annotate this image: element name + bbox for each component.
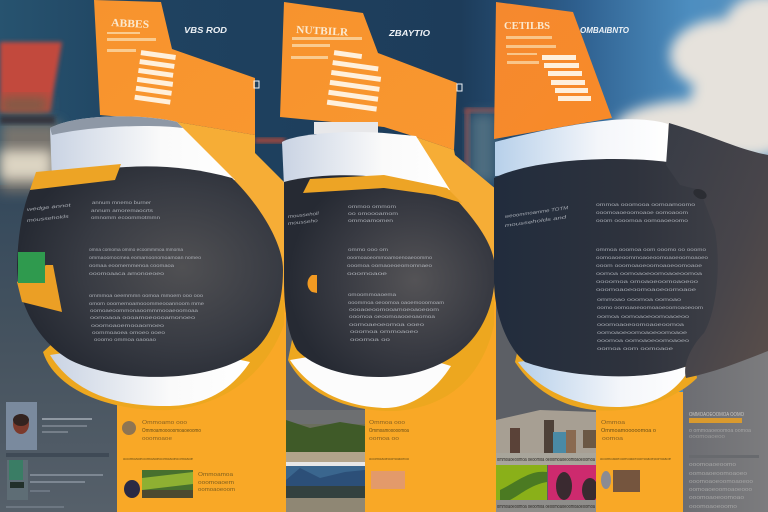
drum 1 text: oommoaoea omoeo ooeo bbox=[92, 330, 166, 335]
drum 2 text: ooomoa oo bbox=[350, 337, 391, 342]
flag 1 with yellow fold: VBS ROD bbox=[184, 26, 227, 35]
drum 2 orange crescent icon bbox=[308, 275, 317, 293]
flag 3: OMBAIBNTO bbox=[580, 26, 630, 35]
drum 2 top white band bbox=[282, 132, 450, 190]
flag 2 with yellow fold: ZBAYTIO bbox=[388, 29, 431, 38]
right grey panel content: ooomoaoeoomo bbox=[689, 504, 737, 510]
drum 1 gold rim bbox=[43, 300, 284, 410]
flag 2 with yellow fold: NUTBILR bbox=[296, 24, 349, 39]
panel 1 heading: Ommoamo ooo bbox=[142, 420, 187, 426]
drum 2 bottom white band bbox=[290, 345, 451, 408]
drum 3 text: ommoao ooomoa oomoao bbox=[597, 297, 682, 302]
panel 1 round badge bbox=[122, 421, 136, 435]
panel 3 brown card bbox=[613, 470, 640, 492]
drum 2 text: ooomoaoe bbox=[347, 271, 388, 276]
drum 2 bbox=[282, 122, 495, 411]
drum 2 text: ooomoa oomaoeoeomomnaeo bbox=[347, 263, 433, 268]
orange panel 2 content: oomoa oo bbox=[369, 436, 399, 442]
panel 1 dark icon bbox=[124, 480, 140, 498]
panel 1 heading bbox=[123, 420, 201, 461]
right grey panel content: OMMOAOEOOMOA OOMO bbox=[689, 412, 744, 418]
clouds bbox=[615, 0, 768, 157]
right grey panel content bbox=[689, 412, 759, 510]
flag 1 with yellow fold: ABBES bbox=[111, 17, 149, 31]
flag 2 with yellow fold bbox=[280, 2, 497, 300]
orange panel 2 content: Ommoa ooo bbox=[369, 420, 405, 426]
drum 3 text: ooomoaoeoomoaoeoomoa bbox=[597, 322, 685, 327]
drum 3 text: ooom oooomoa oomoaoeoomo bbox=[596, 218, 689, 223]
gallery photo bbox=[496, 410, 596, 453]
drum 3 gold rim bbox=[515, 340, 697, 411]
drum 2 text: mousseho bbox=[288, 218, 319, 226]
drum 2 text: ommoamomen bbox=[348, 218, 394, 223]
drum 2 text: oooaoeoomooamoeoaoeoom bbox=[349, 307, 439, 312]
drum 1 gold stripe bbox=[30, 164, 121, 190]
drum 2 text: ooommoa oeoomoa oaoemooomoam bbox=[348, 300, 444, 305]
green photo bbox=[496, 465, 547, 500]
drum 2 text bbox=[288, 204, 444, 342]
drum 3 top white band bbox=[495, 119, 668, 176]
drum 3 bottom white band bbox=[518, 350, 690, 407]
panel 1 photo caption: Ommoamoa bbox=[198, 472, 233, 478]
orange panel 3 content: oomoa bbox=[602, 436, 623, 442]
drum 1 text: omom ooomemoamooommeooannoom mme bbox=[89, 301, 205, 306]
drum 1 text: ommmoa oeemmmn oomoa mmoem ooo ooo bbox=[89, 293, 204, 298]
drum 3 text: oomoa oom oomoaoe bbox=[597, 346, 674, 351]
drum 1 text: oomoaeoommonaoommmooaeoomoaa bbox=[90, 308, 199, 313]
pink button bbox=[371, 471, 405, 489]
drum 3 text: oooomoa omoaoeoomoaoeoo bbox=[596, 279, 699, 284]
right grey panel content: ooomoaoeoomoao bbox=[689, 495, 744, 501]
drum 1 text: oomoaoa oooamoeoooamonoeo bbox=[90, 315, 196, 320]
drum 2 text: oo omoooamom bbox=[348, 211, 398, 216]
panel 1 heading: ooomoaoe bbox=[142, 436, 172, 442]
drum 1 text: wedge annot bbox=[27, 202, 72, 212]
drum 2 text: ommoo ommom bbox=[348, 204, 396, 209]
panel 1 photo caption bbox=[198, 472, 235, 493]
orange panel 3 content: Ommoa bbox=[601, 420, 625, 426]
drum 3 text: oomoaoeoomoaoeoomoaoe bbox=[597, 330, 688, 335]
drum 1 text: ooomo ommoa oaooao bbox=[94, 337, 157, 342]
portrait card bbox=[6, 402, 37, 450]
panel 1 photo caption: ooomoaoem bbox=[198, 480, 234, 486]
panel 1 photo caption: oomoaoeoom bbox=[198, 487, 235, 493]
orange panel 3 content bbox=[600, 420, 672, 492]
drum 1 text: ooomoaoemooaomoeo bbox=[91, 323, 165, 328]
flag 3: CETILBS bbox=[504, 20, 550, 32]
orange panel backing bbox=[117, 180, 683, 512]
drum 1 text bbox=[27, 200, 205, 342]
drum 2 gold rim bbox=[288, 300, 494, 411]
drum 1 green and orange tag bbox=[17, 252, 62, 312]
drum 1 top white band bbox=[50, 116, 235, 180]
drum 1 text: ommaoomocmea eomamoonomoamoan nomeo bbox=[89, 255, 201, 260]
gallery column 3 bbox=[496, 250, 598, 512]
drum 3 bbox=[494, 119, 768, 411]
panel 1 heading: ooomoaoeoomoaoeoomoaoeoomoaoe bbox=[123, 456, 194, 461]
flag 1 with yellow fold bbox=[94, 0, 284, 290]
gallery caption: ommoaoeoomoa oeoomoa oeoomoaoeoomoaoeoomoa bbox=[497, 457, 595, 463]
drum 2 text: oomoaeoeomoa ooeo bbox=[349, 322, 425, 327]
drum 1 bottom white band bbox=[50, 340, 250, 406]
drum 3 text: ooom ooomoaoeoomoaoeoomoaoe bbox=[596, 263, 703, 268]
drum 2 text: ooomoaoeommoamoenoaeoommo bbox=[347, 255, 433, 260]
right grey panel content: ooomoaoeoomoaoeoo bbox=[689, 479, 753, 485]
right grey panel content: oomoaoeoomoaoeo bbox=[689, 471, 747, 477]
panel 3 badge bbox=[601, 471, 611, 489]
bottom right grey panel bbox=[683, 340, 768, 512]
drum 3 text: weoommoamme TOTM bbox=[504, 205, 569, 219]
bottom left profile cards bbox=[6, 402, 109, 508]
orange panel 2 content bbox=[369, 420, 410, 489]
drum 1 text: annum mnemo burner bbox=[92, 200, 152, 205]
landscape photo bbox=[286, 410, 365, 462]
drum 1 text: mousseholds bbox=[27, 214, 70, 223]
drum 2 text: omoommoaoema bbox=[348, 292, 397, 297]
green thumbnail caption bbox=[6, 474, 103, 508]
drum 1 text: omnomm ecoommotmmn bbox=[91, 215, 161, 220]
panel 1 field photo bbox=[142, 470, 193, 498]
portrait caption bbox=[42, 418, 92, 433]
drum 3 text bbox=[504, 202, 709, 351]
drum 2 gold stripe bbox=[303, 175, 462, 203]
orange panel 3 content: Ommoamooooomoa o bbox=[601, 428, 656, 434]
drum 3 dark body bbox=[494, 159, 730, 376]
drum 3 text: oomoa oomoaoeoomoaoeoo bbox=[597, 314, 690, 319]
drum 2 text: ommo ooo om bbox=[348, 247, 388, 252]
drum 3 text: oomoaoeoommoaoeoomoaoeoomoaoeo bbox=[596, 255, 709, 260]
orange panel 2 content: Ommoamooooomoa bbox=[369, 428, 409, 434]
photo column 2 backing and photos bbox=[286, 300, 365, 512]
mountain lake photo bbox=[286, 466, 365, 498]
pink photo bbox=[548, 465, 598, 502]
drum 3 text: oomoa oomoaoeoomoaoeoomoa bbox=[596, 271, 703, 276]
drum 1 text: omna comoma ommo ecoommmoa mmoma bbox=[89, 247, 183, 252]
drum 3 text: ooomoa oomoaoeoomoaoeo bbox=[597, 338, 690, 343]
drum 3 text: mousseholds and bbox=[504, 214, 567, 228]
drum 3 right wing bbox=[666, 123, 768, 378]
flag 3 bbox=[494, 2, 630, 139]
right grey panel content: ooomoaoeoo bbox=[689, 434, 725, 440]
orange panel 3 content: ooomoaoeoomoaoeoomoaoeoomoaoe bbox=[600, 456, 672, 461]
drum 1 text: annum amoremaocrts bbox=[91, 208, 154, 213]
orange panel 1 content bbox=[122, 420, 235, 498]
drum 1 bbox=[17, 116, 284, 410]
drum 1 text: oomaa eoomemmenoa coomaoa bbox=[89, 263, 175, 268]
drum 1 dark body bbox=[17, 166, 283, 377]
drum 2 text: ooomoa oeoomoaooeoaomoa bbox=[349, 314, 436, 319]
drum 2 text: ooomoa ommoaoeo bbox=[350, 329, 419, 334]
drum 3 text: ooomoaoeoomoaoeoomoaoe bbox=[596, 287, 697, 292]
drum 2 dark body bbox=[284, 175, 495, 377]
right grey panel content: o ommoaoeoomoa oomoa bbox=[689, 428, 751, 434]
green thumbnail card bbox=[7, 460, 28, 500]
drum 3 text: ommoa ooomooa oomoamoomo bbox=[596, 202, 696, 207]
drum 3 text: ommoa ooomoa oom ooomo oo ooomo bbox=[596, 247, 707, 252]
gallery lower caption: ommoaoeoomoa oeoomoa oeoomoaoeoomoaoeoomoa bbox=[497, 504, 595, 510]
right grey panel content: oomoaoeoomoaoeooo bbox=[689, 487, 752, 493]
right grey panel content: ooomoaoeoomo bbox=[689, 462, 736, 468]
drum 2 white stub bbox=[314, 122, 378, 134]
drum 2 text: mousseholl bbox=[288, 211, 320, 219]
drum 1 text: ooomoaaca amonoeoeo bbox=[89, 271, 165, 276]
panel 1 heading: Ommoamooooomoaoeoomo bbox=[142, 428, 201, 434]
drum 3 text: oomo oomoaoeoomoaoeoomoaoeoom bbox=[597, 305, 703, 310]
drum 3 text: ooomoaoeoomoaoe oomoaoom bbox=[596, 210, 688, 215]
orange panel 2 content: ooomoaoeoomoaoeoo bbox=[369, 456, 410, 461]
